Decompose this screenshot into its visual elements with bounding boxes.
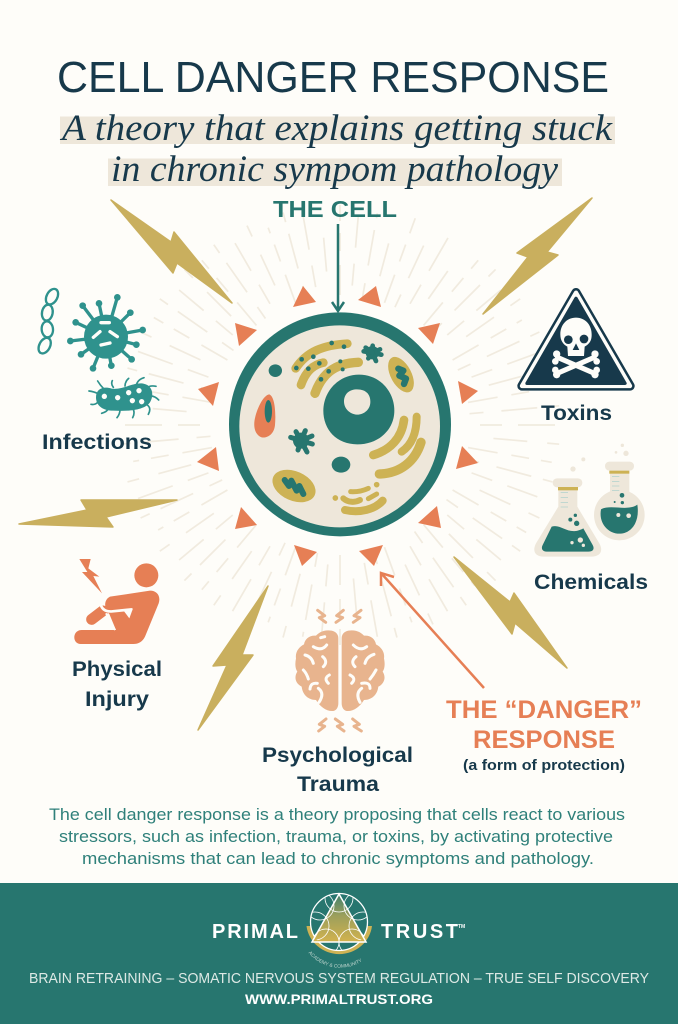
icon: zigzag sparks bbox=[318, 610, 361, 731]
label: psychological trauma: Trauma bbox=[297, 773, 379, 796]
lightning bolts bbox=[19, 198, 592, 730]
description: The cell danger response is a theory proposing that cells react to various bbox=[49, 805, 625, 824]
brand name: PRIMAL bbox=[212, 921, 298, 943]
icon: round flask bbox=[594, 462, 645, 540]
label: physical injury bbox=[72, 658, 162, 711]
label: danger response bbox=[446, 696, 642, 774]
arrow: danger response bbox=[381, 573, 484, 688]
website: WWW.PRIMALTRUST.ORG bbox=[245, 991, 433, 1007]
logo bbox=[306, 892, 372, 968]
icon: physical injury bbox=[74, 559, 159, 644]
label: physical injury: Physical bbox=[72, 658, 162, 681]
label: danger response: THE “DANGER” bbox=[446, 696, 642, 724]
icon: skull bbox=[552, 318, 600, 378]
danger triangles bbox=[197, 286, 478, 566]
subtitle bbox=[59, 108, 615, 190]
small organelles bbox=[269, 346, 381, 473]
icon: bacteria chain bbox=[36, 287, 61, 356]
description bbox=[49, 805, 625, 868]
brand name: TM bbox=[458, 924, 465, 930]
subtitle: A theory that explains getting stuck bbox=[59, 108, 613, 149]
description: mechanisms that can lead to chronic symptoms and pathology. bbox=[82, 849, 594, 868]
icon: conical flask bbox=[534, 478, 601, 557]
icon: chemicals bbox=[534, 444, 645, 557]
cell diagram bbox=[229, 312, 451, 536]
arrow: to the cell bbox=[332, 224, 344, 311]
label: infections: Infections bbox=[42, 431, 152, 454]
brand name bbox=[212, 921, 465, 943]
label: danger response: RESPONSE bbox=[473, 726, 615, 754]
label: toxins: Toxins bbox=[541, 402, 612, 425]
footer band bbox=[0, 883, 678, 1024]
ribosomes bbox=[294, 341, 346, 382]
nucleus bbox=[323, 375, 394, 444]
mitochondria bbox=[267, 353, 419, 509]
title: CELL DANGER RESPONSE bbox=[57, 53, 609, 102]
label: physical injury: Injury bbox=[85, 688, 149, 711]
endoplasmic reticulum bbox=[296, 344, 421, 474]
label: the cell: THE CELL bbox=[273, 196, 397, 222]
label: psychological trauma: Psychological bbox=[262, 744, 413, 767]
description: stressors, such as infection, trauma, or toxins, by activating protective bbox=[59, 827, 613, 846]
label: danger response: (a form of protection) bbox=[463, 757, 625, 774]
golgi bbox=[334, 483, 383, 511]
tagline: BRAIN RETRAINING – SOMATIC NERVOUS SYSTEM REGULATION – TRUE SELF DISCOVERY bbox=[29, 970, 649, 987]
icon: toxins bbox=[522, 293, 630, 386]
icon: bacterium bbox=[89, 378, 159, 418]
icon: brain bbox=[295, 610, 385, 731]
icon: pain bolt bbox=[79, 559, 102, 593]
brand name: TRUST bbox=[381, 921, 458, 943]
icon: virus bbox=[67, 294, 146, 372]
icon: bubbles bbox=[570, 444, 629, 472]
icon: infections bbox=[36, 287, 159, 418]
logo: ACADEMY & COMMUNITY bbox=[308, 952, 361, 968]
vacuole bbox=[254, 394, 275, 438]
label: psychological trauma bbox=[262, 744, 413, 796]
label: chemicals: Chemicals bbox=[534, 571, 648, 594]
subtitle: in chronic sympom pathology bbox=[111, 149, 559, 190]
